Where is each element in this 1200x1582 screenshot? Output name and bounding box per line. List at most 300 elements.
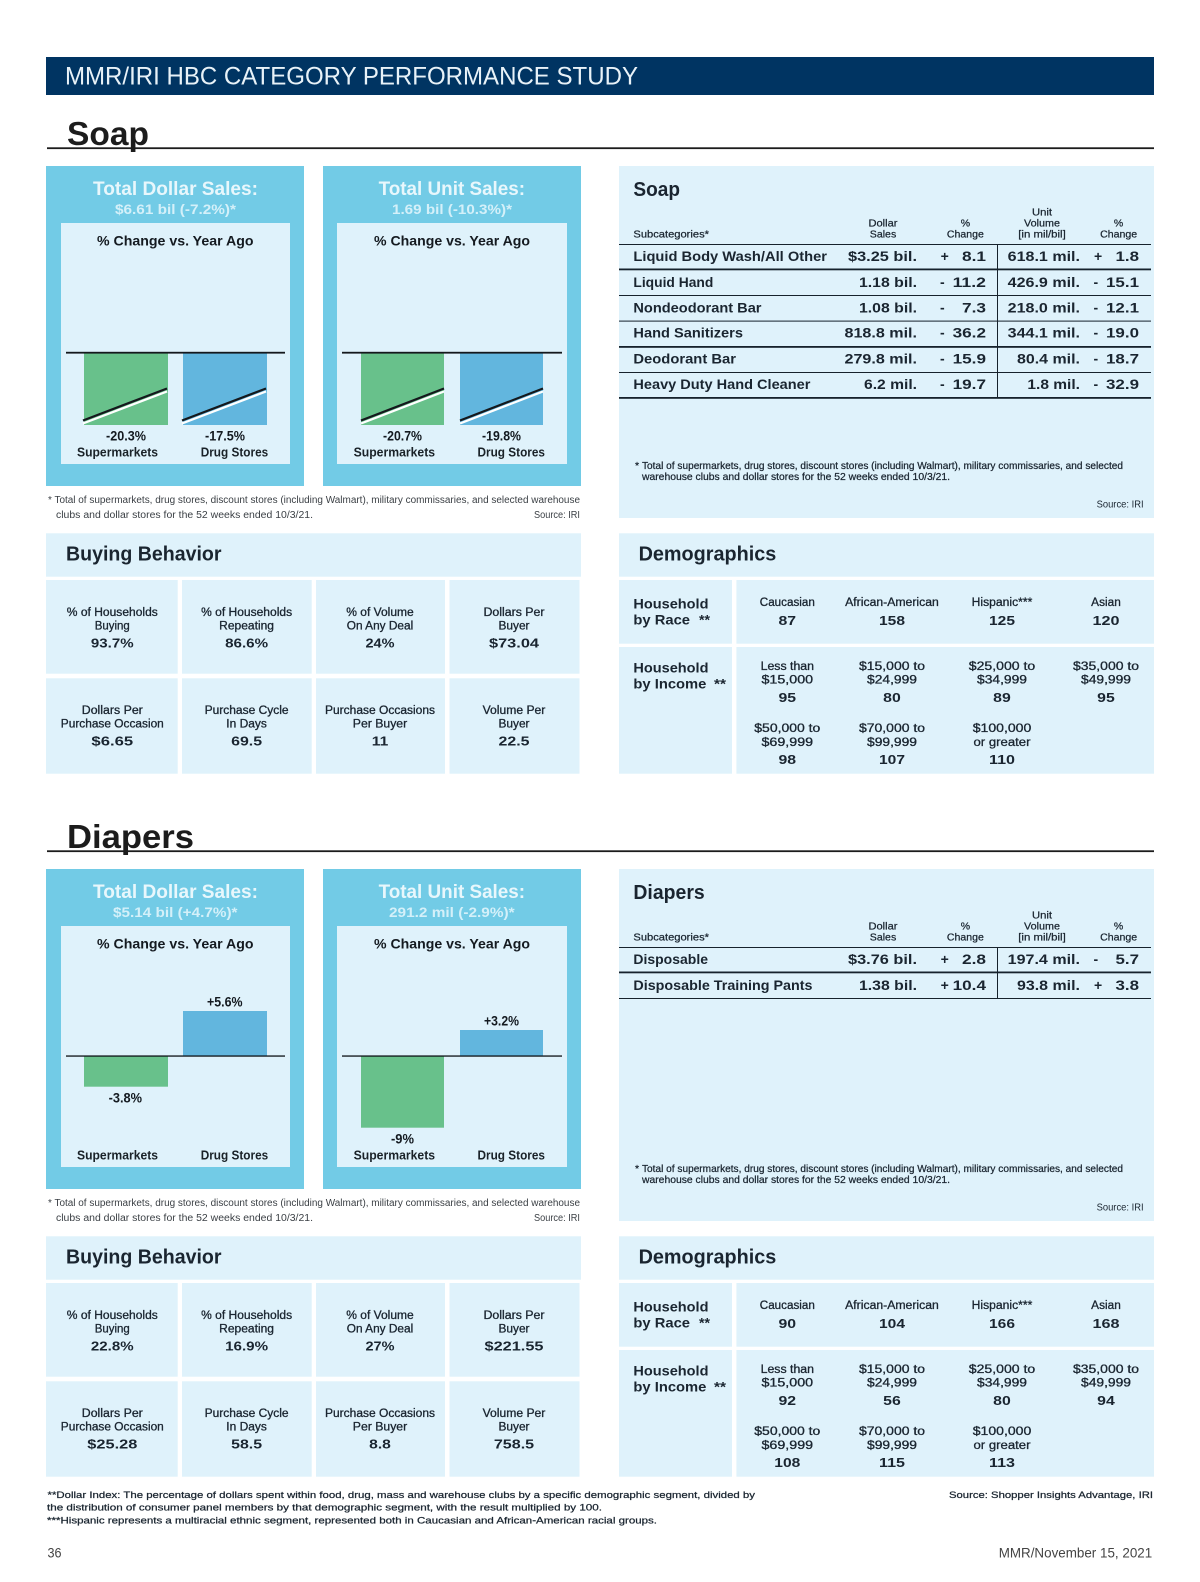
table row: Hand Sanitizers: 19.0 [1106, 325, 1139, 341]
table row: Liquid Hand: 426.9 mil. [1008, 274, 1080, 290]
household by race: Caucasian [760, 597, 815, 609]
metric: households buying: 22.8% [91, 1339, 134, 1354]
metric: purchase cycle: In Days [226, 718, 267, 730]
table row: Liquid Body Wash: Liquid Body Wash/All Other [633, 248, 828, 264]
metric: purchase cycle: 69.5 [231, 734, 262, 749]
metric: dollars per buyer: Buyer [498, 621, 530, 633]
footnotes: dollar index and Hispanic definition: **Dollar Index: The percentage of dollars spent within food, drug, mass and warehouse clubs by a specific demographic segment, divided by [48, 1490, 755, 1501]
panel: total dollar sales: $5.14 bil (+4.7%)* [113, 904, 238, 920]
metric: volume per buyer: 758.5 [494, 1437, 534, 1452]
footnotes: dollar index and Hispanic definition [47, 1490, 755, 1526]
table column headers: Subcategories* [633, 229, 709, 241]
metric: purchase occasions: 8.8 [369, 1437, 391, 1452]
table column headers: % [1114, 921, 1123, 933]
table column headers [633, 910, 1137, 944]
metric: dollars per occasion [46, 1381, 178, 1477]
table column headers [633, 207, 1137, 241]
metric: purchase cycle: Purchase Cycle [205, 705, 289, 717]
table row: Nondeodorant Bar [633, 299, 1139, 315]
table column headers: % [961, 921, 970, 933]
table footnote: Source: IRI [1097, 1202, 1144, 1214]
footnotes: dollar index and Hispanic definition: ***Hispanic represents a multiracial ethnic segment, represented both in Caucasian and African-American racial groups. [47, 1515, 657, 1526]
table row: Deodorant Bar: 18.7 [1106, 350, 1139, 366]
metric: dollars per buyer [450, 1283, 580, 1377]
panel: demographics [619, 1236, 1154, 1477]
table footnote: Total of supermarkets, drug stores, discount stores (including Walmart), military commissaries, and selected [642, 1163, 1123, 1175]
household by income: $35,000 to [1073, 1364, 1139, 1376]
household by income: $99,999 [867, 737, 917, 749]
bar chart: unit sales change: Supermarkets [354, 1149, 435, 1163]
panel: total dollar sales: $6.61 bil (-7.2%)* [115, 201, 237, 217]
bar chart: unit sales change: Drug Stores [478, 446, 545, 460]
metric: volume on deal: On Any Deal [347, 621, 413, 633]
panel: buying behavior [46, 533, 581, 774]
household by income: or greater [974, 1440, 1031, 1452]
table row: Disposable Training Pants: 93.8 mil. [1017, 977, 1080, 993]
panel: demographics [619, 533, 1154, 774]
metric: households repeating: % of Households [201, 607, 292, 619]
household by race: Household [633, 1299, 708, 1315]
panel: total unit sales: 291.2 mil (-2.9%)* [389, 904, 515, 920]
household by income: $24,999 [867, 1377, 917, 1389]
household by income: $50,000 to [754, 723, 820, 735]
metric: dollars per occasion: Purchase Occasion [61, 1421, 164, 1433]
panel: total dollar sales: Total Dollar Sales: [93, 178, 258, 200]
table row: Disposable: - [1094, 951, 1098, 967]
table column headers: Volume [1024, 218, 1060, 230]
metric: volume on deal: % of Volume [346, 1310, 414, 1322]
household by income: $70,000 to [859, 1426, 925, 1438]
household by race: 125 [989, 613, 1015, 628]
household by income: $35,000 to [1073, 661, 1139, 673]
bar chart: unit sales change [342, 1013, 562, 1163]
table row: Deodorant Bar: - [1094, 350, 1098, 366]
table row: Deodorant Bar: 279.8 mil. [844, 350, 917, 366]
household by income: $49,999 [1081, 1377, 1131, 1389]
table row: Nondeodorant Bar: 12.1 [1106, 299, 1139, 315]
household by income: $15,000 [762, 674, 813, 686]
table row: Liquid Hand [633, 274, 1139, 290]
table row: Disposable: 197.4 mil. [1008, 951, 1080, 967]
household by income: $69,999 [762, 737, 813, 749]
metric: purchase occasions: 11 [372, 734, 388, 749]
household by race: by Race [633, 1314, 690, 1330]
footnote: chart sources [48, 495, 580, 521]
table row: Deodorant Bar: - [940, 350, 945, 366]
table row: Liquid Body Wash: 8.1 [962, 248, 986, 264]
metric: households repeating: 16.9% [225, 1339, 269, 1354]
table column headers: % [1114, 218, 1123, 230]
metric: dollars per occasion: Dollars Per [82, 705, 143, 717]
table row: Disposable: + [941, 951, 949, 967]
panel: demographics: Demographics [639, 544, 776, 566]
household by income: $34,999 [977, 1377, 1027, 1389]
table row: Deodorant Bar [633, 350, 1139, 366]
table row: Disposable Training Pants: 10.4 [953, 977, 986, 993]
household by income: $69,999 [762, 1440, 813, 1452]
metric: purchase cycle: Purchase Cycle [205, 1408, 289, 1420]
household by race: Hispanic*** [972, 597, 1033, 609]
metric: purchase occasions: Per Buyer [353, 718, 407, 730]
metric: households buying [46, 1283, 178, 1377]
metric: dollars per buyer: Dollars Per [484, 1310, 545, 1322]
household by income: $34,999 [977, 674, 1027, 686]
panel: subcategories table: Diapers [633, 882, 705, 904]
table row: Nondeodorant Bar: Nondeodorant Bar [633, 299, 762, 315]
table row: Liquid Body Wash: + [941, 248, 949, 264]
household by income: $50,000 to [754, 1426, 820, 1438]
metric: dollars per occasion: $25.28 [87, 1437, 137, 1452]
household by race: 120 [1092, 613, 1120, 628]
table column headers: % [961, 218, 970, 230]
panel: total dollar sales: % Change vs. Year Ago [97, 936, 254, 952]
household by income: $99,999 [867, 1440, 917, 1452]
household by race [619, 580, 1154, 644]
household by income: or greater [974, 737, 1031, 749]
bar chart: dollar sales change: -17.5% [205, 428, 245, 444]
section: Diapers [46, 818, 1154, 1477]
household by race: Caucasian [760, 1300, 815, 1312]
household by income: by Income [633, 1378, 707, 1394]
table footnote: warehouse clubs and dollar stores for the 52 weeks ended 10/3/21. [641, 471, 950, 483]
table row: Disposable Training Pants: 1.38 bil. [859, 977, 917, 993]
metric: volume per buyer: Volume Per [483, 705, 546, 717]
table column headers: Dollar [868, 218, 898, 230]
household by race: ** [699, 1314, 711, 1330]
table column headers: Unit [1032, 910, 1052, 922]
panel: subcategories table [619, 166, 1154, 518]
household by race: African-American [845, 597, 939, 609]
table column headers: Subcategories* [633, 932, 709, 944]
metric: purchase cycle: 58.5 [231, 1437, 262, 1452]
household by race: African-American [845, 1300, 939, 1312]
footnote: chart sources: * Total of supermarkets, drug stores, discount stores (including Walmart), military commissaries, and selected warehouse [48, 1198, 580, 1209]
household by income [619, 647, 1154, 774]
household by income: ** [714, 675, 727, 691]
metric: volume per buyer: Buyer [498, 1421, 530, 1433]
footnote: chart sources [48, 1198, 580, 1224]
household by race: 104 [879, 1316, 906, 1331]
table column headers: Change [947, 932, 984, 944]
bar chart: dollar sales change: -20.3% [106, 428, 146, 444]
footnote: chart sources: clubs and dollar stores for the 52 weeks ended 10/3/21. [56, 1213, 313, 1224]
page header banner [46, 57, 1154, 95]
bar chart: dollar sales change: Drug Stores [201, 446, 268, 460]
table row: Nondeodorant Bar: - [1094, 299, 1098, 315]
household by income: 115 [879, 1455, 905, 1470]
metric: households buying [46, 580, 178, 674]
household by income: $25,000 to [969, 1364, 1035, 1376]
table footnote: Total of supermarkets, drug stores, discount stores (including Walmart), military commissaries, and selected [642, 460, 1123, 472]
table row: Disposable Training Pants: + [1094, 977, 1102, 993]
table column headers: Sales [870, 932, 896, 944]
metric: purchase occasions: Purchase Occasions [325, 705, 435, 717]
metric: dollars per buyer [450, 580, 580, 674]
household by income: Household [633, 1363, 708, 1379]
metric: purchase occasions: Per Buyer [353, 1421, 407, 1433]
metric: households repeating [182, 580, 312, 674]
table footnote [635, 460, 1144, 511]
metric: households buying: 93.7% [91, 636, 134, 651]
household by income: ** [714, 1378, 727, 1394]
footnote: chart sources: * Total of supermarkets, drug stores, discount stores (including Walmart), military commissaries, and selected warehouse [48, 495, 580, 506]
household by race: by Race [633, 611, 690, 627]
table row: Heavy Duty Hand Cleaner [633, 376, 1139, 392]
table row: Disposable: Disposable [633, 951, 708, 967]
table column headers: Change [1100, 229, 1137, 241]
metric: households repeating: Repeating [219, 621, 274, 633]
metric: purchase cycle [182, 1381, 312, 1477]
table row: Nondeodorant Bar: - [940, 299, 945, 315]
bar chart: unit sales change: -9% [391, 1131, 415, 1147]
metric: purchase cycle [182, 678, 312, 774]
table column headers: Change [947, 229, 984, 241]
household by income: $15,000 to [859, 1364, 925, 1376]
household by race: ** [699, 611, 711, 627]
household by income: 98 [778, 752, 796, 767]
table row: Liquid Hand: 11.2 [953, 274, 986, 290]
panel: buying behavior [46, 1236, 581, 1477]
table footnote [635, 1163, 1144, 1214]
metric: volume on deal [316, 580, 445, 674]
table row: Heavy Duty Hand Cleaner: 19.7 [953, 376, 986, 392]
household by income: 95 [778, 690, 796, 705]
metric: dollars per occasion: $6.65 [91, 734, 133, 749]
table row: Disposable [633, 951, 1139, 967]
bar chart: dollar sales change: Supermarkets [77, 1149, 158, 1163]
household by income: $100,000 [973, 723, 1031, 735]
household by race [619, 1283, 1154, 1347]
panel: total unit sales [323, 869, 581, 1189]
metric: volume per buyer: 22.5 [498, 734, 530, 749]
metric: purchase occasions [316, 678, 445, 774]
household by income: 80 [993, 1393, 1011, 1408]
table column headers: Sales [870, 229, 896, 241]
table row: Deodorant Bar: 80.4 mil. [1017, 350, 1080, 366]
household by race: 166 [989, 1316, 1015, 1331]
household by income: 95 [1097, 690, 1115, 705]
table column headers: [in mil/bil] [1018, 229, 1066, 241]
table row: Hand Sanitizers: 818.8 mil. [844, 325, 917, 341]
household by race: 158 [879, 613, 905, 628]
bar chart: unit sales change: -19.8% [482, 428, 521, 444]
footnote: chart sources: Source: IRI [534, 510, 580, 521]
metric: dollars per occasion: Dollars Per [82, 1408, 143, 1420]
household by income: 80 [883, 690, 901, 705]
household by income: 92 [778, 1393, 796, 1408]
metric: purchase cycle: In Days [226, 1421, 267, 1433]
panel: subcategories table [619, 869, 1154, 1221]
metric: volume per buyer [450, 678, 580, 774]
metric: volume on deal [316, 1283, 445, 1377]
bar chart: unit sales change: +3.2% [484, 1013, 519, 1029]
household by income: 94 [1097, 1393, 1116, 1408]
metric: dollars per occasion: Purchase Occasion [61, 718, 164, 730]
footnote: chart sources: Source: IRI [534, 1213, 580, 1224]
panel: total dollar sales [46, 869, 304, 1189]
metric: households repeating: Repeating [219, 1324, 274, 1336]
panel: total dollar sales [46, 166, 304, 486]
page number: 36 [48, 1545, 62, 1561]
bar chart: dollar sales change [66, 994, 285, 1163]
heading: Diapers: Diapers [67, 818, 194, 855]
table row: Heavy Duty Hand Cleaner: 6.2 mil. [864, 376, 917, 392]
table row: Disposable Training Pants: 3.8 [1116, 977, 1139, 993]
household by income: Less than [761, 1364, 814, 1376]
household by race: Asian [1091, 1300, 1121, 1312]
panel: buying behavior: Buying Behavior [66, 544, 222, 566]
table row: Disposable: 2.8 [962, 951, 986, 967]
table row: Disposable Training Pants: + [941, 977, 949, 993]
household by income: $100,000 [973, 1426, 1031, 1438]
metric: volume per buyer: Buyer [498, 718, 530, 730]
household by income: 113 [989, 1455, 1015, 1470]
table row: Nondeodorant Bar: 7.3 [962, 299, 986, 315]
household by income: 56 [883, 1393, 901, 1408]
table row: Liquid Body Wash [633, 248, 1139, 264]
table row: Liquid Hand: 15.1 [1106, 274, 1139, 290]
panel: total unit sales: Total Unit Sales: [379, 178, 525, 200]
table row: Nondeodorant Bar: 218.0 mil. [1008, 299, 1080, 315]
metric: purchase occasions: Purchase Occasions [325, 1408, 435, 1420]
household by income [619, 1350, 1154, 1477]
source note: Source: Shopper Insights Advantage, IRI [949, 1490, 1153, 1501]
household by race: 87 [778, 613, 796, 628]
table row: Hand Sanitizers: - [1094, 325, 1098, 341]
household by race: Hispanic*** [972, 1300, 1033, 1312]
table row: Deodorant Bar: 15.9 [953, 350, 986, 366]
panel: buying behavior: Buying Behavior [66, 1247, 222, 1269]
panel: subcategories table: Soap [633, 179, 680, 201]
metric: volume per buyer: Volume Per [483, 1408, 546, 1420]
table row: Heavy Duty Hand Cleaner: 1.8 mil. [1027, 376, 1080, 392]
household by race: Household [633, 596, 708, 612]
table row: Liquid Body Wash: + [1094, 248, 1102, 264]
table row: Deodorant Bar: Deodorant Bar [633, 350, 737, 366]
bar chart: dollar sales change: Drug Stores [201, 1149, 268, 1163]
household by income: Household [633, 660, 708, 676]
bar chart: dollar sales change: -3.8% [109, 1090, 142, 1106]
panel: total unit sales: Total Unit Sales: [379, 881, 525, 903]
publication and date: MMR/November 15, 2021 [999, 1545, 1152, 1561]
table row: Disposable: $3.76 bil. [848, 951, 917, 967]
table row: Hand Sanitizers: 344.1 mil. [1008, 325, 1080, 341]
metric: dollars per buyer: Buyer [498, 1324, 530, 1336]
panel: total dollar sales: Total Dollar Sales: [93, 881, 258, 903]
page header banner: MMR/IRI HBC CATEGORY PERFORMANCE STUDY [65, 62, 638, 90]
footnotes: dollar index and Hispanic definition: the distribution of consumer panel members by that demographic segment, with the result multiplied by 100. [47, 1503, 602, 1514]
household by income: 108 [774, 1455, 800, 1470]
table row: Disposable: 5.7 [1116, 951, 1139, 967]
footnote: chart sources: clubs and dollar stores for the 52 weeks ended 10/3/21. [56, 510, 313, 521]
household by income: 107 [879, 752, 905, 767]
household by income: $49,999 [1081, 674, 1131, 686]
metric: households buying: % of Households [67, 607, 158, 619]
panel: total unit sales: % Change vs. Year Ago [374, 232, 530, 248]
table row: Hand Sanitizers: Hand Sanitizers [633, 325, 743, 341]
table row: Disposable Training Pants [633, 977, 1139, 993]
panel: total unit sales: % Change vs. Year Ago [374, 936, 530, 952]
table row: Liquid Body Wash: 1.8 [1116, 248, 1139, 264]
metric: dollars per buyer: $73.04 [489, 636, 540, 651]
table row: Disposable Training Pants: Disposable Training Pants [633, 977, 813, 993]
metric: households repeating [182, 1283, 312, 1377]
metric: purchase occasions [316, 1381, 445, 1477]
table column headers: [in mil/bil] [1018, 932, 1066, 944]
table row: Liquid Hand: - [940, 274, 945, 290]
household by income: $25,000 to [969, 661, 1035, 673]
table row: Heavy Duty Hand Cleaner: - [1094, 376, 1098, 392]
table row: Liquid Body Wash: 618.1 mil. [1008, 248, 1080, 264]
table column headers: Unit [1032, 207, 1052, 219]
bar chart: dollar sales change [66, 352, 285, 460]
table row: Liquid Body Wash: $3.25 bil. [848, 248, 917, 264]
metric: dollars per buyer: $221.55 [484, 1339, 544, 1354]
table row: Liquid Hand: 1.18 bil. [859, 274, 917, 290]
metric: dollars per occasion [46, 678, 178, 774]
household by income: 110 [989, 752, 1015, 767]
table footnote: * [635, 1163, 639, 1175]
metric: households repeating: % of Households [201, 1310, 292, 1322]
metric: households repeating: 86.6% [225, 636, 269, 651]
table column headers: Change [1100, 932, 1137, 944]
table row: Heavy Duty Hand Cleaner: 32.9 [1106, 376, 1139, 392]
household by income: $15,000 [762, 1377, 813, 1389]
table row: Nondeodorant Bar: 1.08 bil. [859, 299, 917, 315]
table row: Heavy Duty Hand Cleaner: - [940, 376, 945, 392]
panel: total unit sales [323, 166, 581, 486]
section: Soap [46, 115, 1154, 774]
table row: Liquid Hand: - [1094, 274, 1098, 290]
panel: demographics: Demographics [639, 1247, 776, 1269]
table row: Hand Sanitizers: 36.2 [953, 325, 986, 341]
table column headers: Volume [1024, 921, 1060, 933]
household by race: 90 [778, 1316, 796, 1331]
metric: households buying: Buying [95, 1324, 130, 1336]
household by income: $24,999 [867, 674, 917, 686]
household by income: 89 [993, 690, 1011, 705]
metric: households buying: Buying [95, 621, 130, 633]
metric: volume on deal: % of Volume [346, 607, 414, 619]
table column headers: Dollar [868, 921, 898, 933]
heading: Soap: Soap [67, 115, 149, 152]
household by race: 168 [1092, 1316, 1120, 1331]
metric: volume per buyer [450, 1381, 580, 1477]
panel: total unit sales: 1.69 bil (-10.3%)* [392, 201, 513, 217]
bar chart: dollar sales change: Supermarkets [77, 446, 158, 460]
table footnote: warehouse clubs and dollar stores for the 52 weeks ended 10/3/21. [641, 1174, 950, 1186]
metric: volume on deal: 27% [366, 1339, 395, 1354]
bar chart: unit sales change: Drug Stores [478, 1149, 545, 1163]
household by income: by Income [633, 675, 707, 691]
metric: households buying: % of Households [67, 1310, 158, 1322]
table footnote: * [635, 460, 639, 472]
metric: dollars per buyer: Dollars Per [484, 607, 545, 619]
household by income: $70,000 to [859, 723, 925, 735]
panel: total dollar sales: % Change vs. Year Ago [97, 232, 254, 248]
table row: Heavy Duty Hand Cleaner: Heavy Duty Hand Cleaner [633, 376, 811, 392]
table row: Hand Sanitizers: - [940, 325, 945, 341]
bar chart: unit sales change: -20.7% [383, 428, 422, 444]
household by race: Asian [1091, 597, 1121, 609]
metric: volume on deal: On Any Deal [347, 1324, 413, 1336]
table footnote: Source: IRI [1097, 499, 1144, 511]
household by income: Less than [761, 661, 814, 673]
table row: Liquid Hand: Liquid Hand [633, 274, 713, 290]
metric: volume on deal: 24% [366, 636, 395, 651]
table row: Hand Sanitizers [633, 325, 1139, 341]
bar chart: dollar sales change: +5.6% [207, 994, 243, 1010]
